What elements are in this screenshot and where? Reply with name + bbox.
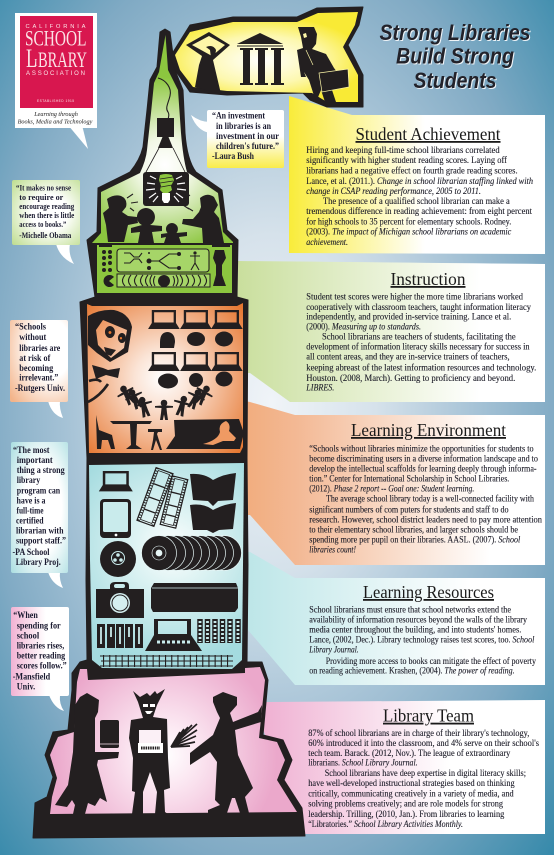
figure: person reaching bbox=[190, 692, 262, 813]
body text: tion.” Center for International Scholarship in School Libraries. bbox=[309, 474, 509, 485]
quote: Laura Bush: “An investment bbox=[212, 110, 265, 120]
quote: Michelle Obama: access to books.” bbox=[19, 220, 66, 229]
title: Build Strong bbox=[396, 44, 514, 68]
logo: California School Library Association: CALIFORNIA bbox=[26, 24, 86, 30]
icon: film strips bbox=[137, 468, 188, 528]
quote: Rutgers University: becoming bbox=[19, 363, 54, 373]
quote: PA School Library Project: have is a bbox=[16, 496, 46, 506]
body text: spending more per pupil on their libraries. AASL. (2007). School bbox=[309, 535, 521, 546]
icon: disc stack bbox=[142, 536, 242, 570]
quote: Rutgers University: -Rutgers Univ. bbox=[15, 383, 65, 393]
logo: California School Library Association: Learning through bbox=[33, 111, 78, 118]
panel: student achievement background bbox=[289, 96, 545, 254]
body text bbox=[308, 728, 539, 830]
logo: California School Library Association: Books, Media and Technology bbox=[18, 118, 93, 126]
quote: PA School Library Project: full-time bbox=[16, 506, 44, 516]
section: Library Team bbox=[308, 706, 539, 830]
quote: Michelle Obama bbox=[12, 180, 80, 264]
quote: Michelle Obama: encourage reading bbox=[19, 202, 74, 211]
body text: Lance, (2002, Dec.). Library technology raises test scores, too. School bbox=[309, 635, 535, 646]
icon: graduate bbox=[186, 32, 230, 94]
logo: California School Library Association: ESTABLISHED 1915 bbox=[37, 99, 74, 103]
section: Student Achievement bbox=[306, 124, 533, 248]
quote: Laura Bush: -Laura Bush bbox=[212, 151, 254, 161]
quote: PA School Library Project: support staff.” bbox=[16, 536, 66, 546]
panel: green console bbox=[97, 245, 232, 293]
body text: tech team. Barack. (2012, Nov.). The league of extraordinary bbox=[308, 748, 511, 759]
body text: Lance, et al. (2011.). Change in school librarian staffing linked with bbox=[306, 176, 533, 187]
quote: Mansfield University: -Mansfield bbox=[13, 672, 50, 682]
body text: have well-developed instructional strategies based on thinking bbox=[308, 779, 515, 789]
panel: instruction background bbox=[235, 261, 545, 402]
quote: Rutgers University bbox=[10, 320, 68, 418]
quote: Laura Bush: investment in our bbox=[216, 131, 279, 141]
body text bbox=[309, 606, 536, 677]
body text: critically, communicating creatively in a variety of media, and bbox=[308, 789, 514, 800]
body text: achievement. bbox=[306, 238, 348, 248]
body text: leadership. Trilling, (2010, Jan.). From libraries to learning bbox=[308, 809, 505, 820]
section: Learning Environment bbox=[309, 420, 542, 556]
body text: cooperatively with classroom teachers, taught information literacy bbox=[306, 302, 531, 313]
heading: Learning Resources bbox=[363, 582, 494, 602]
body text: Hiring and keeping full-time school librarians correlated bbox=[306, 145, 500, 156]
logo: California School Library Association: L bbox=[26, 44, 37, 73]
body text: to their elementary school libraries, and larger schools should be bbox=[309, 526, 518, 536]
quote: PA School Library Project: “The most bbox=[13, 445, 50, 455]
icon: tape row bbox=[97, 624, 143, 648]
heading: Library Team bbox=[383, 706, 474, 726]
figure: woman with book bbox=[55, 693, 119, 814]
icon: long device bbox=[151, 583, 238, 612]
lamp cord bbox=[158, 78, 170, 120]
figure: librarian portrait bbox=[88, 310, 132, 402]
body text: significantly with higher student reading scores. Laying off bbox=[306, 155, 508, 166]
quote: PA School Library Project: program can bbox=[17, 486, 60, 496]
quote: Michelle Obama: “It makes no sense bbox=[16, 184, 71, 192]
icon: tablet bbox=[100, 499, 131, 538]
logo: California School Library Association bbox=[15, 13, 97, 149]
tier: library team bbox=[50, 667, 297, 814]
icon: camera bbox=[96, 582, 144, 618]
quote: PA School Library Project: -PA School bbox=[12, 547, 50, 557]
quote: Mansfield University: Univ. bbox=[17, 682, 35, 692]
icon: laptop keyboard bbox=[145, 619, 202, 651]
icon: books bbox=[190, 473, 236, 533]
body text: independently, and provided in-service training. Lance et al. bbox=[306, 313, 511, 323]
body text: The presence of a qualified school librarian can make a bbox=[323, 196, 510, 207]
console circuit screen bbox=[117, 249, 209, 272]
quote: PA School Library Project: library bbox=[17, 475, 41, 485]
quote: Michelle Obama: -Michelle Obama bbox=[19, 231, 71, 240]
quote: Laura Bush: children's future.” bbox=[216, 141, 279, 151]
body text: for high schools to 35 percent for elementary schools. Rodney. bbox=[306, 216, 511, 228]
quote: Rutgers University: libraries are bbox=[19, 343, 60, 353]
body text: librarians had a negative effect on fourth grade reading scores. bbox=[306, 166, 518, 176]
library tower illustration bbox=[33, 29, 305, 838]
body text: “Libratories.” School Library Activities Monthly. bbox=[308, 820, 463, 830]
body text: change in CSAP reading performance, 2005 to 2011. bbox=[306, 186, 481, 197]
console buttons bbox=[102, 250, 114, 287]
body text: School librarians are teachers of students, facilitating the bbox=[322, 331, 516, 342]
heading: Student Achievement bbox=[356, 124, 500, 144]
student heads bbox=[158, 332, 233, 388]
body text: media center throughout the building, and into students' homes. bbox=[309, 626, 521, 636]
body text: School librarians have deep expertise in digital literacy skills; bbox=[325, 769, 526, 779]
console wave band bbox=[117, 274, 210, 287]
logo: California School Library Association: ASSOCIATION bbox=[26, 71, 85, 77]
title bbox=[380, 20, 530, 93]
quote: Michelle Obama: to require or bbox=[19, 193, 64, 202]
title: Students bbox=[414, 68, 496, 93]
quote: Rutgers University: without bbox=[19, 332, 46, 342]
quote: PA School Library Project: certified bbox=[16, 516, 44, 526]
body text bbox=[306, 145, 533, 248]
body text: development of information literacy skills necessary for success in bbox=[306, 341, 530, 352]
icon: key columns bbox=[200, 619, 238, 643]
body text: (2000). Measuring up to standards. bbox=[306, 321, 421, 332]
panel: learning environment background bbox=[245, 401, 545, 565]
body text: LIBRES. bbox=[305, 384, 334, 394]
furniture and reader bbox=[96, 415, 244, 450]
quote: PA School Library Project: thing a strong bbox=[17, 465, 65, 475]
quote: Mansfield University: school bbox=[17, 630, 40, 640]
quote: Mansfield University bbox=[11, 607, 69, 711]
tower black outline bbox=[33, 29, 305, 838]
paper dolls bbox=[114, 382, 216, 420]
quote: Mansfield University: spending for bbox=[17, 620, 61, 630]
quote: Mansfield University: libraries rises, bbox=[17, 640, 64, 650]
icon: disc bbox=[100, 541, 136, 577]
body text: libraries count! bbox=[309, 546, 356, 556]
body text: on reading achievement. Krashen, (2004). The power of reading. bbox=[309, 666, 515, 677]
body text: significant numbers of com puters for students and staff to do bbox=[309, 504, 509, 515]
body text: Library Journal. bbox=[309, 645, 359, 655]
quote: Laura Bush bbox=[191, 110, 284, 168]
panel: learning resources background bbox=[245, 551, 545, 685]
quote: Rutgers University: irrelevant.” bbox=[19, 373, 59, 383]
quote: Rutgers University: “Schools bbox=[15, 322, 46, 332]
body text: solving problems creatively; and are role models for strong bbox=[308, 799, 503, 810]
heading: Learning Environment bbox=[351, 420, 506, 440]
section: Learning Resources bbox=[309, 582, 536, 677]
icon: laptop bbox=[99, 471, 133, 491]
body text: Student test scores were higher the more time librarians worked bbox=[306, 292, 523, 302]
quote: Mansfield University: better reading bbox=[17, 650, 66, 660]
title: Strong Libraries bbox=[380, 20, 530, 45]
icon: library building bbox=[237, 33, 284, 85]
quote: Michelle Obama: when there is little bbox=[19, 211, 75, 220]
quote: Mansfield University: scores follow.” bbox=[17, 660, 67, 670]
quote: Mansfield University: “When bbox=[13, 610, 38, 620]
quote: PA School Library Project: librarian with bbox=[16, 526, 64, 536]
logo: California School Library Association: I bbox=[34, 58, 38, 69]
body text: (2012). Phase 2 report -- Goal one: Student learning. bbox=[309, 484, 474, 495]
quote: Rutgers University: at risk of bbox=[19, 353, 51, 363]
banner: graduate, library, businessman bbox=[170, 7, 363, 107]
quote: PA School Library Project: important bbox=[17, 455, 53, 465]
body text: (2003). The impact of Michigan school librarians on academic bbox=[306, 226, 512, 238]
body text: Houston. (2008, March). Getting to proficiency and beyond. bbox=[306, 373, 515, 384]
body text: all content areas, and they are in-service trainers of teachers, bbox=[306, 351, 510, 362]
body text: keeping abreast of the latest information resources and technology. bbox=[306, 363, 536, 374]
tier: learning environment bbox=[87, 303, 244, 453]
icon: light bulb bbox=[143, 172, 189, 206]
lamp bbox=[157, 118, 174, 148]
quote: Laura Bush: in libraries is an bbox=[216, 121, 271, 131]
panel: library team background bbox=[255, 700, 545, 834]
body text: librarians. School Library Journal. bbox=[308, 759, 418, 769]
quote: PA School Library Project: Library Proj. bbox=[16, 557, 61, 567]
body text: tremendous difference in reading achievement: from eight percent bbox=[306, 206, 532, 217]
body text bbox=[309, 444, 542, 556]
icon: fan bbox=[171, 724, 197, 747]
figure: student with laptop bbox=[129, 689, 170, 814]
console figure bbox=[213, 250, 226, 286]
logo: California School Library Association: BRARY bbox=[38, 47, 87, 72]
quote: PA School Library Project bbox=[11, 442, 68, 588]
heading: Instruction bbox=[390, 269, 466, 289]
icon: grid bbox=[100, 656, 233, 666]
section: Instruction bbox=[305, 269, 536, 394]
body text: School librarians must ensure that school networks extend the bbox=[309, 606, 511, 616]
body text bbox=[305, 292, 536, 394]
tier: technology spire bbox=[92, 35, 233, 243]
laptops bbox=[148, 310, 243, 371]
tier: learning resources bbox=[89, 463, 244, 669]
icon: businessman with briefcase bbox=[297, 27, 349, 102]
figures: people around the light bbox=[103, 194, 224, 243]
logo: California School Library Association: SCHOOL bbox=[25, 26, 86, 50]
